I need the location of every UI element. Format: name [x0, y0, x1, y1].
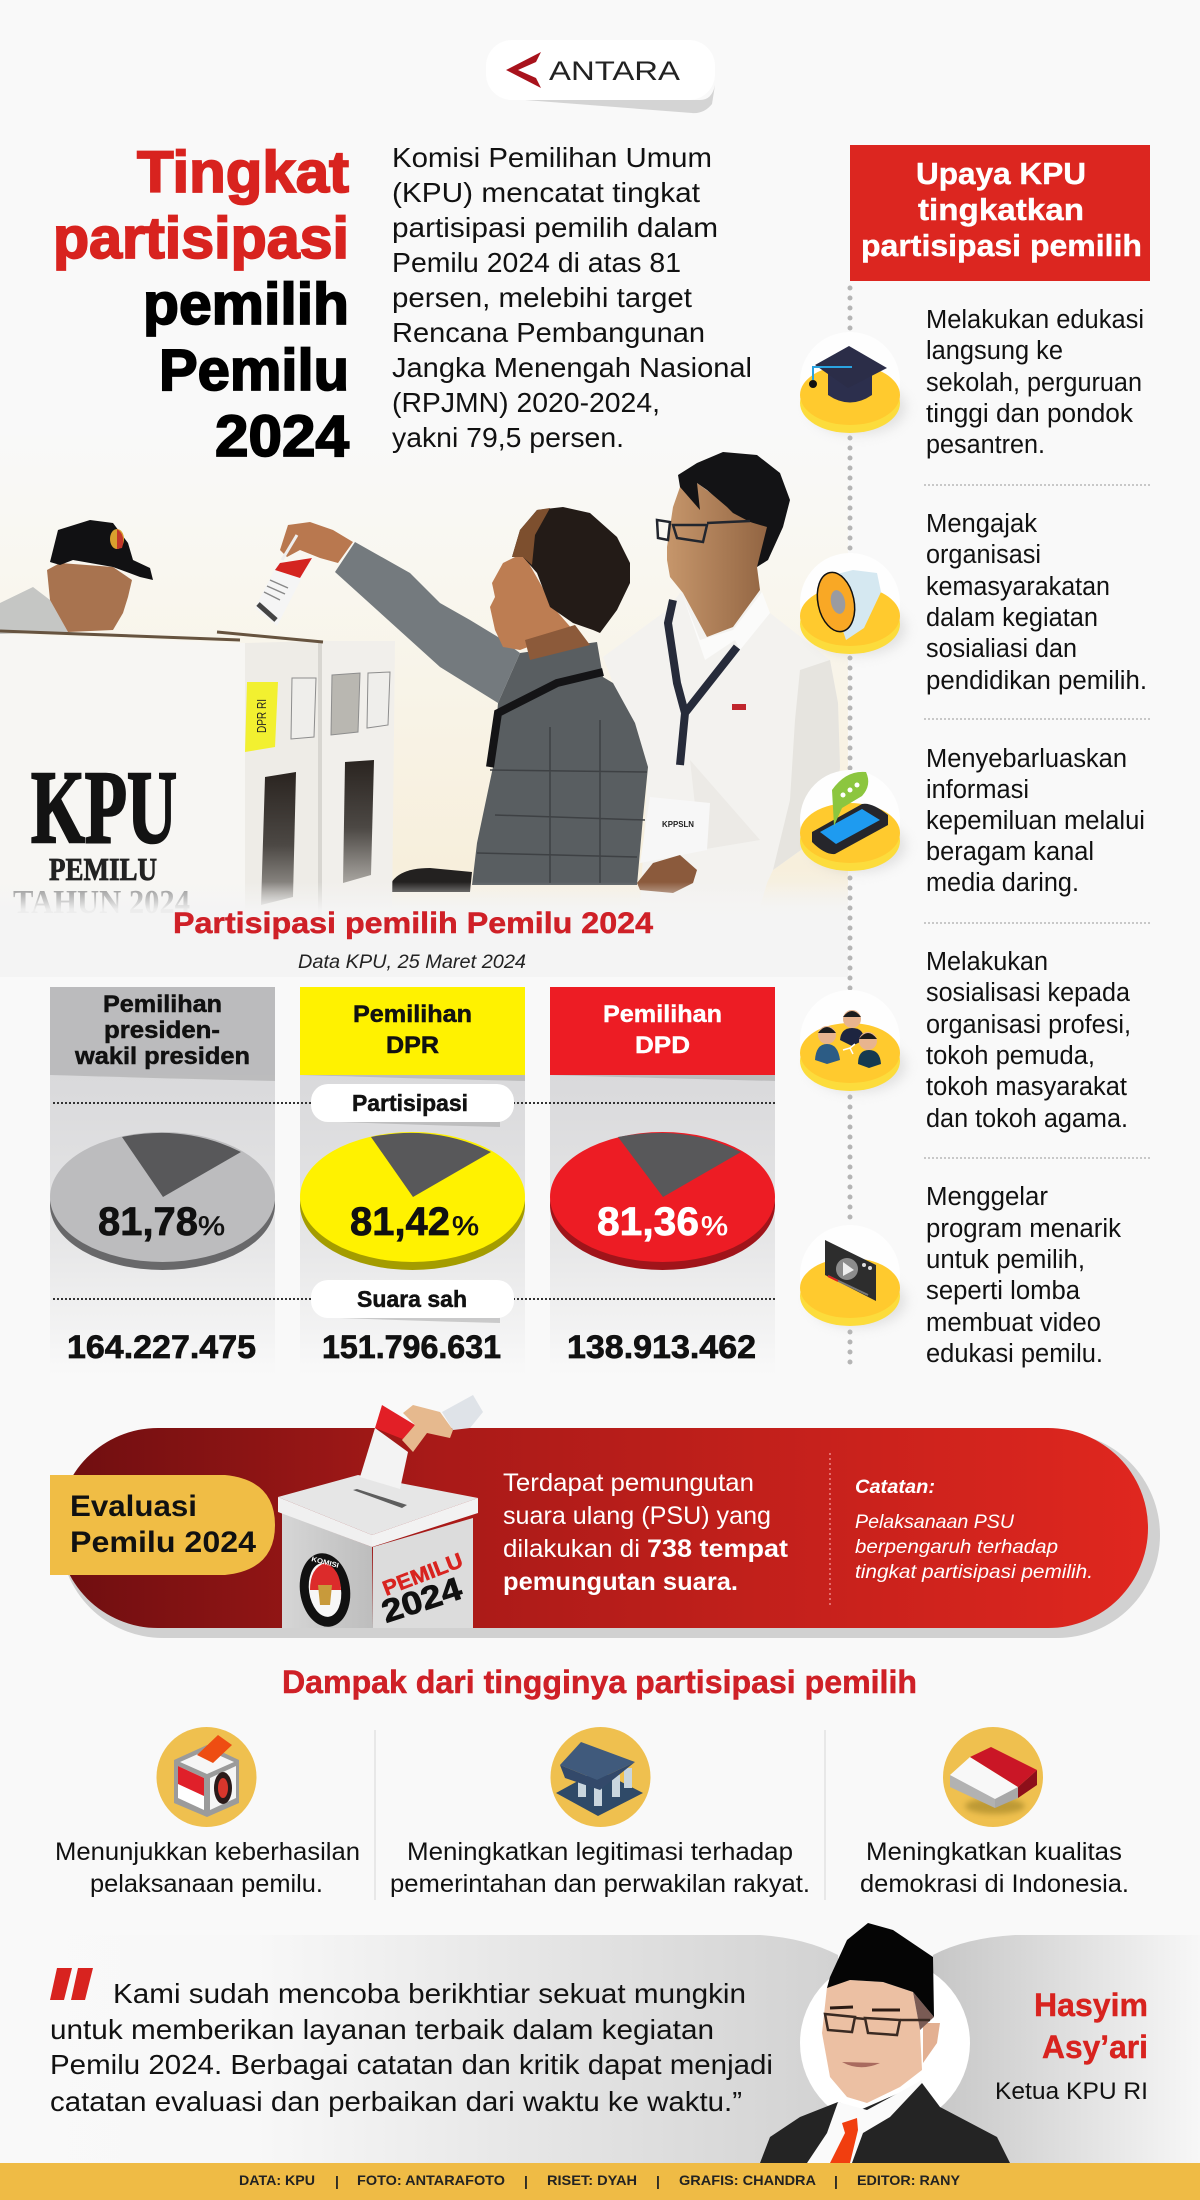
- voter hand: [280, 522, 353, 563]
- footer credits: DATA: KPU: [239, 2172, 315, 2188]
- panel: Upaya KPU: partisipasi pemilih: [861, 228, 1142, 263]
- heading: Partisipasi pemilih Pemilu 2024: [173, 907, 653, 973]
- logo: ANTARA: ANTARA: [549, 56, 680, 86]
- title: [53, 140, 349, 469]
- intro text block: persen, melebihi target: [392, 282, 692, 313]
- valid vote numbers: 151.796.631: [322, 1329, 501, 1365]
- text: item 5: membuat video: [926, 1309, 1101, 1337]
- label: Partisipasi: [311, 1084, 514, 1127]
- title: Tingkat: [137, 140, 349, 205]
- text: item 4: sosialisasi kepada: [926, 979, 1131, 1007]
- label: Suara sah: [311, 1280, 514, 1323]
- column: DPR: DPR: [386, 1032, 439, 1059]
- icon: government building: [550, 1727, 650, 1827]
- text: PSU statement: dilakukan di: [503, 1535, 640, 1563]
- intro text block: Jangka Menengah Nasional: [392, 352, 752, 383]
- column: DPD: [550, 987, 775, 1375]
- text: item 2: pendidikan pemilih.: [926, 667, 1147, 695]
- text: Catatan: [855, 1476, 1093, 1583]
- footer credits: FOTO: ANTARAFOTO: [357, 2172, 505, 2188]
- text: Catatan: berpengaruh terhadap: [855, 1536, 1058, 1558]
- text: item 5: program menarik: [926, 1215, 1121, 1243]
- icon: video camera: [800, 1225, 906, 1327]
- pie: DPR 81,42%: %: [452, 1211, 479, 1241]
- intro text block: (RPJMN) 2020-2024,: [392, 387, 660, 418]
- tag: Evaluasi Pemilu 2024: [50, 1475, 275, 1575]
- icon: megaphone: [800, 553, 906, 655]
- text: item 4: [926, 948, 1131, 1133]
- valid vote numbers: 138.913.462: [567, 1329, 756, 1365]
- column: DPD: Pemilihan: [603, 1001, 722, 1028]
- name: Hasyim Asy'ari: [995, 1987, 1148, 2105]
- illustration: ballot box with hand: PEMILU: [380, 1549, 466, 1601]
- intro text block: [392, 142, 752, 453]
- text: Catatan: Pelaksanaan PSU: [855, 1511, 1015, 1533]
- impact 2: legitimasi: pemerintahan dan perwakilan rakyat.: [390, 1870, 810, 1898]
- intro text block: partisipasi pemilih dalam: [392, 212, 718, 243]
- text: item 2: organisasi: [926, 541, 1041, 569]
- pie: DPD 81,36%: [550, 1132, 775, 1270]
- column: DPR: [300, 987, 525, 1375]
- tag: Evaluasi Pemilu 2024: Pemilu 2024: [70, 1526, 256, 1559]
- impact 3: kualitas demokrasi: demokrasi di Indonesia.: [860, 1870, 1129, 1898]
- title: pemilih: [143, 272, 349, 337]
- quote text: untuk memberikan layanan terbaik dalam kegiatan: [50, 2014, 714, 2045]
- logo: ANTARA: [486, 40, 715, 113]
- valid vote numbers: [67, 1329, 756, 1365]
- icon: graduation cap: [800, 332, 906, 434]
- column: presiden: wakil presiden: [74, 1043, 250, 1070]
- icon: quotation mark: [50, 1968, 93, 2000]
- ballot paper: [255, 535, 312, 626]
- text: item 5: seperti lomba: [926, 1277, 1081, 1305]
- text: item 5: edukasi pemilu.: [926, 1340, 1103, 1368]
- valid vote numbers: 164.227.475: [67, 1329, 256, 1365]
- footer credits: GRAFIS: CHANDRA: [679, 2172, 816, 2188]
- name: Hasyim Asy'ari: Ketua KPU RI: [995, 2078, 1148, 2105]
- panel: Upaya KPU: tingkatkan: [918, 192, 1084, 227]
- impact 1: keberhasilan pemilu: [55, 1727, 360, 1898]
- quote text: catatan evaluasi dan perbaikan dari waktu ke waktu.”: [50, 2086, 742, 2117]
- impact 3: kualitas demokrasi: [860, 1727, 1129, 1898]
- text: item 5: untuk pemilih,: [926, 1246, 1085, 1274]
- intro text block: yakni 79,5 persen.: [392, 422, 624, 453]
- text: Catatan: Catatan:: [855, 1476, 935, 1498]
- column: presiden: [50, 987, 275, 1375]
- label: Partisipasi: Partisipasi: [352, 1090, 468, 1116]
- text: item 4: Melakukan: [926, 948, 1048, 976]
- column: presiden: Pemilihan: [103, 991, 222, 1018]
- heading: Dampak: Dampak dari tingginya partisipasi pemilih: [282, 1664, 917, 1700]
- footer credits: |: [524, 2173, 528, 2189]
- text: item 4: dan tokoh agama.: [926, 1105, 1128, 1133]
- name: Hasyim Asy'ari: Hasyim: [1034, 1987, 1148, 2023]
- pie: DPD 81,36%: %: [701, 1211, 728, 1241]
- text: item 1: pesantren.: [926, 431, 1045, 459]
- dotted timeline: [848, 288, 852, 1370]
- footer credits: |: [834, 2173, 838, 2189]
- panel: Upaya KPU: Upaya KPU: [916, 156, 1086, 191]
- box text: KPU: KPU: [31, 750, 177, 865]
- pie: DPD 81,36%: 81,36: [597, 1200, 699, 1244]
- text: item 3: informasi: [926, 776, 1029, 804]
- impact 1: keberhasilan pemilu: pelaksanaan pemilu.: [90, 1870, 323, 1898]
- tag: Evaluasi Pemilu 2024: Evaluasi: [70, 1490, 197, 1523]
- text: item 5: Menggelar: [926, 1183, 1049, 1211]
- intro text block: (KPU) mencatat tingkat: [392, 177, 700, 208]
- column: presiden: presiden-: [104, 1017, 220, 1044]
- pie: presiden 81,78%: [50, 1132, 275, 1270]
- heading: Partisipasi pemilih Pemilu 2024: Partisipasi pemilih Pemilu 2024: [173, 907, 653, 940]
- right man in white shirt: [603, 452, 840, 907]
- text: item 2: dalam kegiatan: [926, 604, 1098, 632]
- text: item 5: [926, 1183, 1121, 1368]
- ballot boxes: [0, 631, 395, 921]
- box label: DPR RI: [245, 682, 278, 752]
- icon: smartphone with chat bubble: [800, 770, 906, 872]
- text: PSU statement: pemungutan suara.: [503, 1568, 738, 1596]
- voter hair: [512, 507, 630, 633]
- pie: DPR 81,42%: [300, 1132, 525, 1270]
- icon: ballot box: [156, 1727, 256, 1827]
- pie: presiden 81,78%: %: [198, 1211, 225, 1241]
- intro text block: Pemilu 2024 di atas 81: [392, 247, 681, 278]
- panel: Evaluasi Pemilu 2024: [50, 1395, 1160, 1638]
- impact 2: legitimasi: Meningkatkan legitimasi terhadap: [407, 1838, 793, 1866]
- footer credits: |: [656, 2173, 660, 2189]
- quote text: Kami sudah mencoba berikhtiar sekuat mungkin: [113, 1978, 746, 2009]
- footer credits: |: [335, 2173, 339, 2189]
- left officer with cap: [0, 520, 153, 634]
- photo: voters at KPU ballot box: [0, 452, 848, 977]
- text: item 1: sekolah, perguruan: [926, 369, 1142, 397]
- text: item 2: Mengajak: [926, 510, 1037, 538]
- illustration: ballot box with hand: [278, 1395, 483, 1630]
- quote text: [50, 1978, 773, 2117]
- icon: people meeting: [800, 990, 906, 1092]
- text: item 2: kemasyarakatan: [926, 573, 1110, 601]
- chart panel: participation columns: [50, 987, 775, 1375]
- text: item 2: [926, 510, 1147, 695]
- voter casting ballot: [280, 507, 648, 892]
- voter face: [490, 553, 573, 650]
- impact 2: legitimasi: [390, 1727, 810, 1898]
- panel: quote: [0, 1923, 1200, 2165]
- impact 1: keberhasilan pemilu: Menunjukkan keberhasilan: [55, 1838, 360, 1866]
- illustration: ballot box with hand: 2024: [377, 1570, 466, 1630]
- intro text block: Komisi Pemilihan Umum: [392, 142, 712, 173]
- text: PSU statement: [503, 1469, 789, 1596]
- text: item 1: Melakukan edukasi: [926, 306, 1144, 334]
- text: item 4: tokoh pemuda,: [926, 1042, 1095, 1070]
- column: DPR: Pemilihan: [353, 1001, 472, 1028]
- text: item 3: Menyebarluaskan: [926, 745, 1127, 773]
- impact 3: kualitas demokrasi: Meningkatkan kualitas: [866, 1838, 1122, 1866]
- text: Catatan: tingkat partisipasi pemilih.: [855, 1561, 1093, 1583]
- icon: Indonesian flag block: [943, 1727, 1043, 1827]
- intro text block: Rencana Pembangunan: [392, 317, 705, 348]
- KPU badge: KOMISI: [311, 1556, 339, 1570]
- text: item 3: kepemiluan melalui: [926, 807, 1145, 835]
- text: item 2: sosialiasi dan: [926, 635, 1077, 663]
- text: PSU statement: suara ulang (PSU) yang: [503, 1502, 771, 1530]
- text: item 3: beragam kanal: [926, 838, 1094, 866]
- text: item 1: langsung ke: [926, 337, 1063, 365]
- footer credits: [0, 2163, 1200, 2200]
- text: PSU statement: 738 tempat: [647, 1535, 789, 1563]
- column: DPD: DPD: [635, 1032, 690, 1059]
- quote text: Pemilu 2024. Berbagai catatan dan kritik dapat menjadi: [50, 2049, 773, 2080]
- voter arm: [335, 542, 520, 703]
- KPU badge: [295, 1550, 355, 1630]
- label: Suara sah: Suara sah: [357, 1286, 467, 1312]
- text: item 3: media daring.: [926, 869, 1079, 897]
- box text: TAHUN 2024: TAHUN 2024: [13, 884, 190, 921]
- text: item 1: tinggi dan pondok: [926, 400, 1133, 428]
- box label: DPR RI: DPR RI: [254, 699, 269, 733]
- title: Pemilu: [159, 338, 349, 403]
- pie: DPR 81,42%: 81,42: [350, 1200, 450, 1244]
- title: partisipasi: [53, 206, 349, 271]
- text: item 1: [926, 306, 1144, 459]
- pie: presiden 81,78%: 81,78: [98, 1200, 198, 1244]
- portrait: Hasyim Asy'ari: [760, 1923, 1010, 2163]
- voter torso: [472, 642, 648, 885]
- footer credits: EDITOR: RANY: [857, 2172, 961, 2188]
- panel: Upaya KPU: [850, 145, 1150, 281]
- text: item 4: organisasi profesi,: [926, 1011, 1131, 1039]
- text: item 4: tokoh masyarakat: [926, 1073, 1127, 1101]
- name: Hasyim Asy'ari: Asy’ari: [1042, 2029, 1148, 2065]
- photo backdrop: [0, 430, 848, 977]
- text: PSU statement: Terdapat pemungutan: [503, 1469, 754, 1497]
- text: item 3: [926, 745, 1145, 897]
- box text: PEMILU: PEMILU: [49, 851, 157, 887]
- right man in white shirt: KPPSLN: [662, 820, 694, 829]
- heading: Partisipasi pemilih Pemilu 2024: Data KPU, 25 Maret 2024: [298, 952, 526, 973]
- title: 2024: [215, 404, 349, 469]
- footer credits: RISET: DYAH: [547, 2172, 637, 2188]
